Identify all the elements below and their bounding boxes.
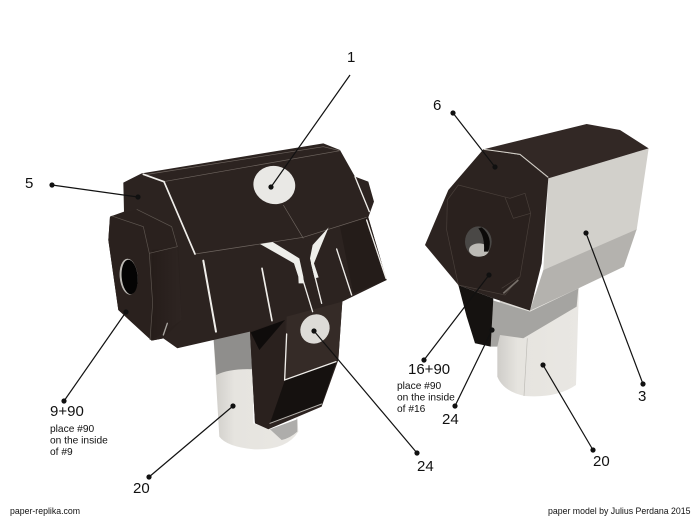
footer right: paper model by Julius Perdana 2015 <box>548 506 691 516</box>
right paper model <box>425 124 649 396</box>
part number labels: 20 <box>133 480 150 497</box>
part number labels <box>25 49 646 497</box>
note: place 90 left: of #9 <box>50 447 73 458</box>
part number labels: 1 <box>347 49 355 66</box>
part number labels: 9+90 <box>50 403 84 420</box>
left lower disc <box>294 308 336 350</box>
left chest chevrons <box>260 227 329 283</box>
left stem <box>213 330 298 449</box>
part number labels: 24 <box>442 411 459 428</box>
part number labels: 6 <box>433 97 441 114</box>
left hole <box>118 258 139 295</box>
note: place 90 left: place #90 <box>50 424 95 435</box>
part number labels: 5 <box>25 175 33 192</box>
part number labels: 20 <box>593 453 610 470</box>
left upper disc <box>250 162 299 208</box>
leader lines <box>50 75 645 479</box>
part number labels: 3 <box>638 388 646 405</box>
note: place 90 right: place #90 <box>397 381 442 392</box>
right body <box>425 124 649 347</box>
left body white strips <box>143 174 386 423</box>
footer left: paper-replika.com <box>10 506 80 516</box>
note: place 90 left: on the inside <box>50 436 108 446</box>
note: place 90 right: of #16 <box>397 404 426 415</box>
part number labels: 16+90 <box>408 361 450 378</box>
part number labels: 24 <box>417 458 434 475</box>
right stem <box>490 287 579 396</box>
left body <box>108 143 387 429</box>
right hole <box>465 226 492 257</box>
left paper model <box>108 143 387 449</box>
note: place 90 right: on the inside <box>397 392 455 404</box>
